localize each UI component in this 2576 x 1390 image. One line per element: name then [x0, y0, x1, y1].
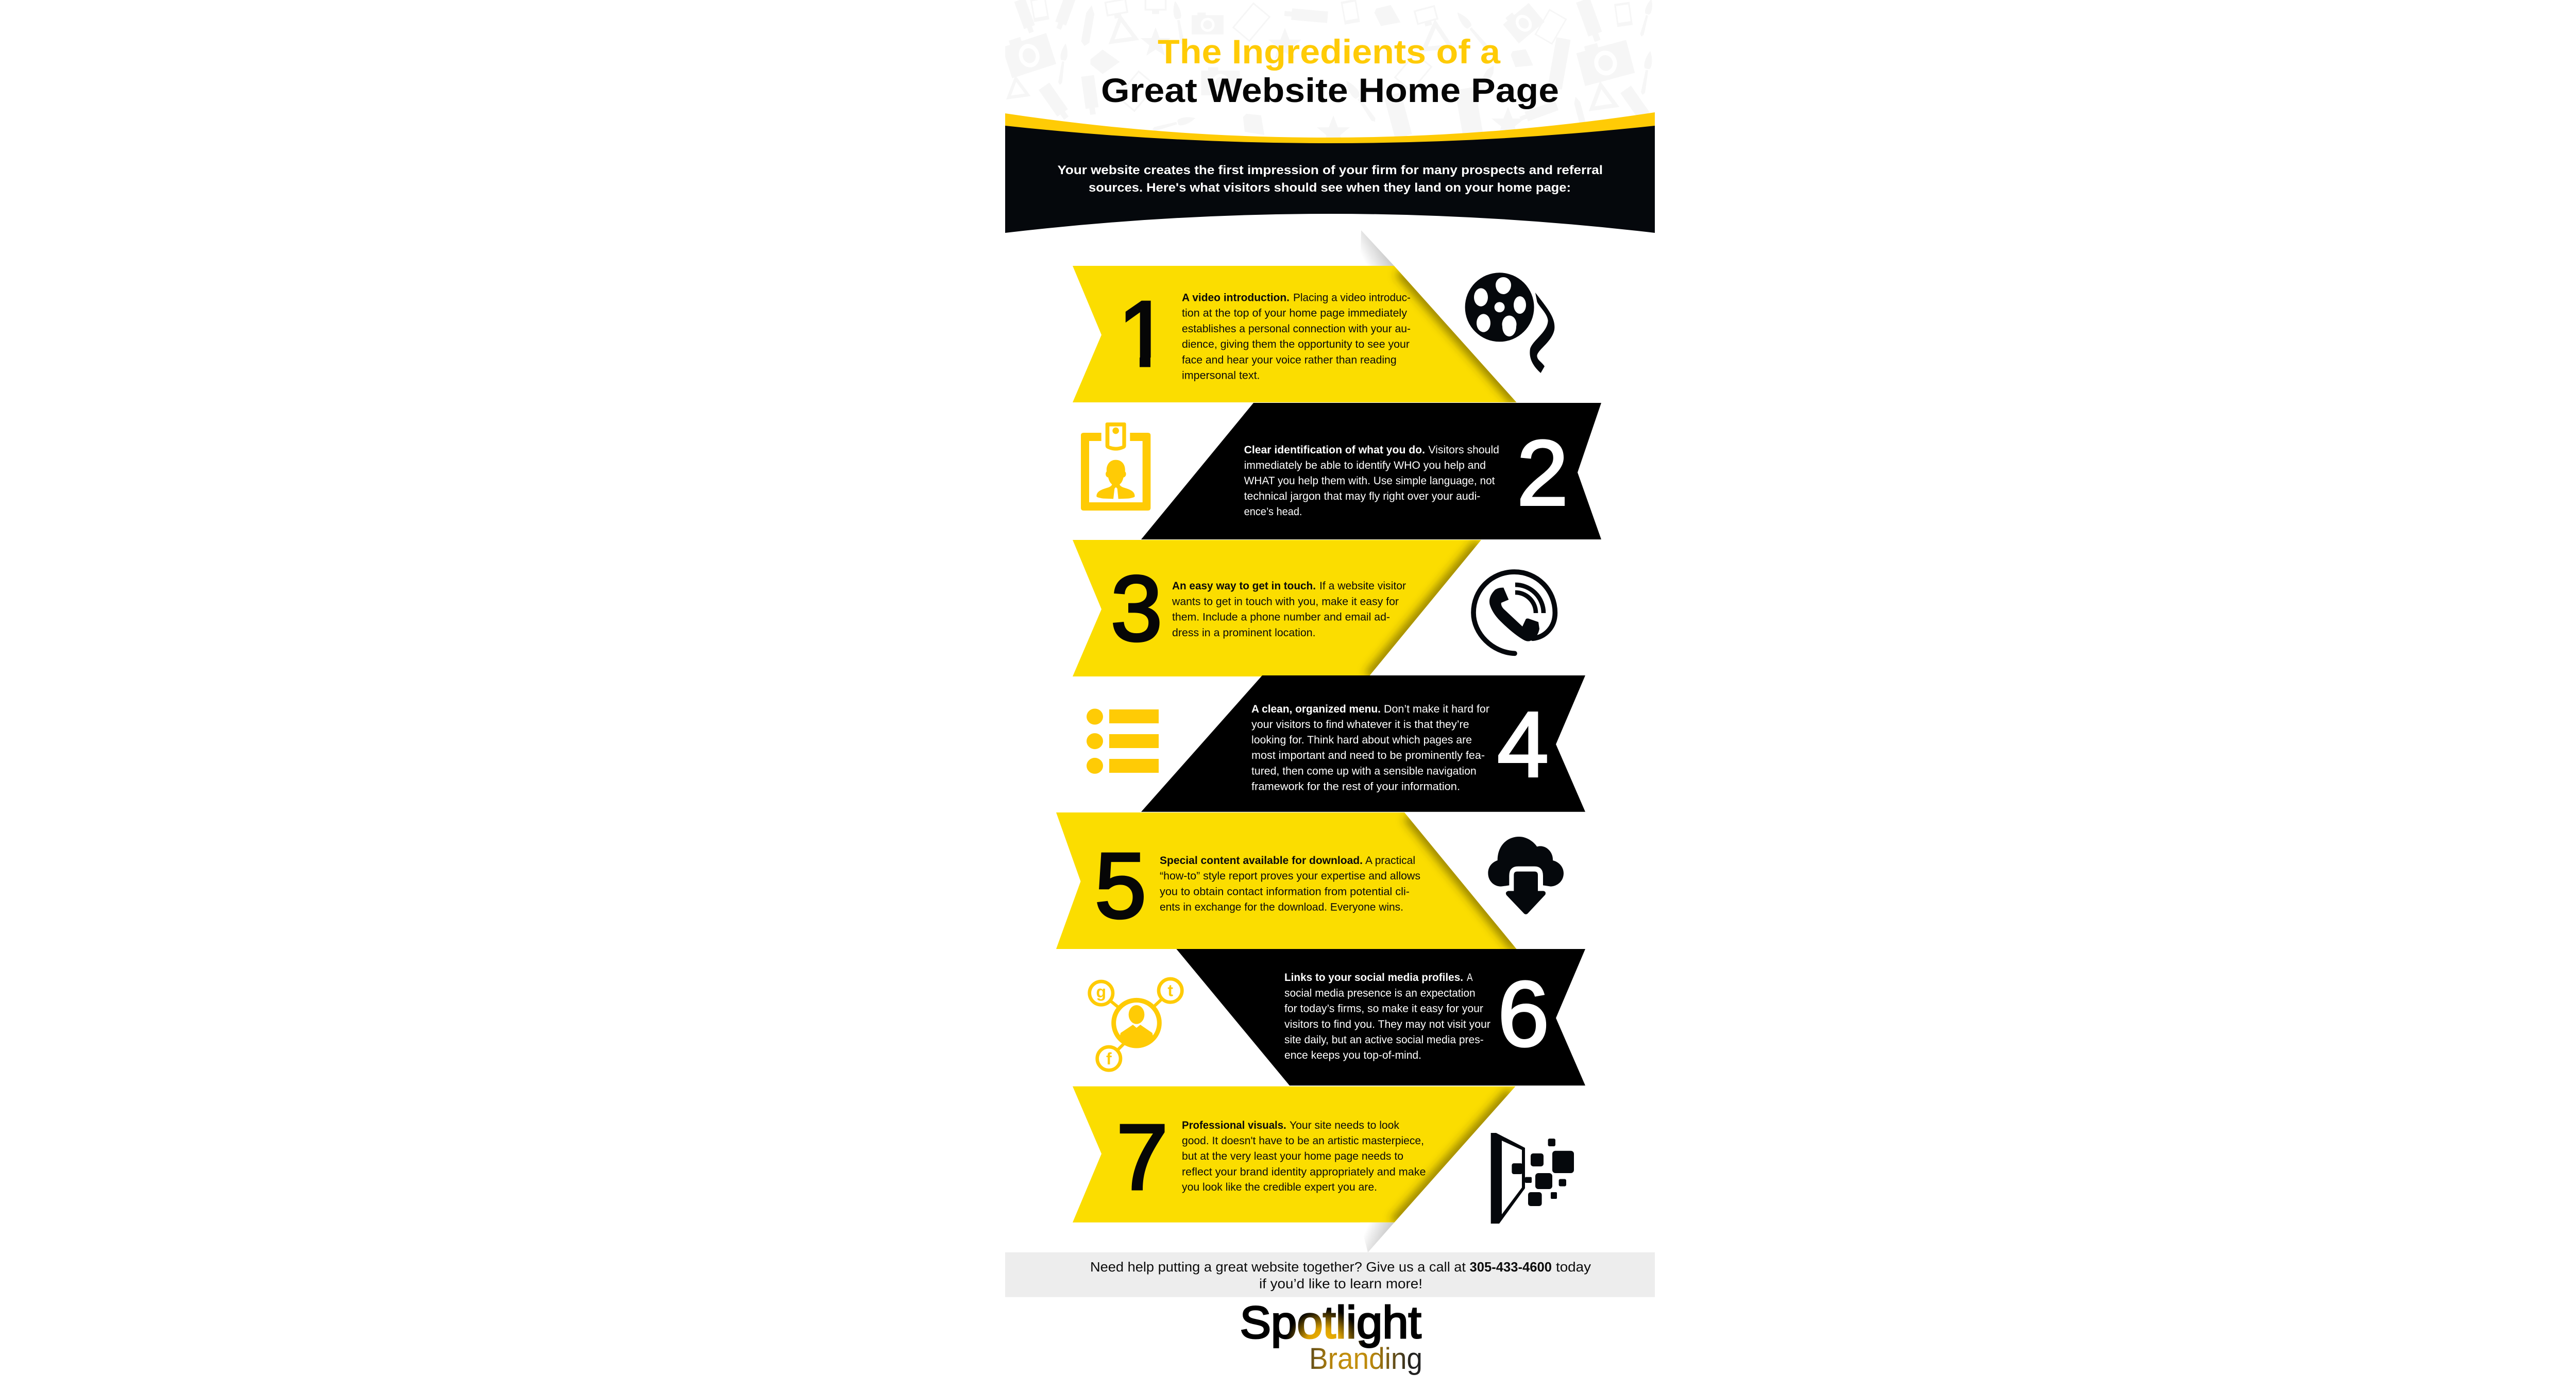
- text: professional visuals: Professional visuals.: [1182, 1120, 1286, 1131]
- number 2: 2: [1517, 421, 1568, 525]
- ribbon 3 edge shading: [1369, 543, 1479, 676]
- intro text: [1057, 163, 1603, 195]
- text: easy way to get in touch: wants to get in touch with you, make it easy for: [1172, 596, 1399, 608]
- text: easy way to get in touch: them. Include a phone number and email ad-: [1172, 612, 1390, 623]
- yellow ribbon 3: [1073, 540, 1481, 676]
- call-to-action text: 305-433-4600: [1469, 1260, 1552, 1275]
- icon: social network: f: [1106, 1049, 1112, 1068]
- text: clean organized menu: tured, then come up with a sensible navigation: [1251, 766, 1477, 777]
- curved yellow band: [1005, 112, 1655, 155]
- text: clear identification: Visitors should: [1428, 444, 1499, 456]
- text: easy way to get in touch: dress in a prominent location.: [1172, 627, 1316, 639]
- ribbon 1 edge shading: [1399, 272, 1517, 402]
- panel: item 5 special content: [1056, 812, 1564, 949]
- text: special content: Special content available for download.: [1160, 855, 1363, 867]
- text: clear identification: ence’s head.: [1244, 506, 1302, 518]
- text: clean organized menu: Don’t make it hard for: [1384, 703, 1489, 715]
- title: [1101, 32, 1559, 109]
- fold shadow above first ribbon: [1360, 230, 1394, 266]
- text: clean organized menu: most important and need to be prominently fea-: [1251, 750, 1485, 761]
- text: clear identification: Clear identification of what you do.: [1244, 444, 1425, 456]
- yellow ribbon 1: [1073, 266, 1517, 402]
- icon: social network: t: [1167, 981, 1173, 999]
- text: professional visuals: Your site needs to look: [1290, 1120, 1400, 1131]
- text: professional visuals: reflect your brand identity appropriately and make: [1182, 1166, 1426, 1178]
- footer call-to-action bar: [1005, 1252, 1655, 1297]
- panel: item 7 professional visuals: [1073, 1087, 1574, 1224]
- number 1: 1: [1118, 282, 1170, 386]
- text: special content: you to obtain contact information from potential cli-: [1160, 886, 1410, 897]
- panel: item 2 clear identification: [1081, 403, 1601, 539]
- title: Great Website Home Page: [1101, 71, 1559, 109]
- title: The Ingredients of a: [1158, 32, 1501, 71]
- black ribbon 4: [1141, 675, 1585, 812]
- black ribbon 2: [1141, 403, 1601, 539]
- call-to-action text: if you’d like to learn more!: [1259, 1277, 1422, 1292]
- text: video introduction: establishes a personal connection with your au-: [1182, 323, 1411, 335]
- Spotlight Branding logo: Spotlight: [1240, 1297, 1421, 1348]
- text: special content: “how-to” style report proves your expertise and allows: [1160, 870, 1420, 882]
- text: social media profiles: visitors to find you. They may not visit your: [1284, 1019, 1490, 1030]
- call-to-action text: Need help putting a great website together? Give us a call at: [1090, 1260, 1466, 1275]
- fold shadow below last ribbon: [1360, 1223, 1394, 1252]
- black ribbon 6: [1176, 949, 1585, 1086]
- text: clear identification: [1244, 444, 1499, 518]
- icon: cloud download: [1488, 837, 1564, 914]
- yellow ribbon 7: [1073, 1087, 1516, 1223]
- text: professional visuals: you look like the credible expert you are.: [1182, 1181, 1377, 1193]
- black intro banner: [1005, 126, 1655, 233]
- number 7: 7: [1116, 1106, 1168, 1209]
- text: social media profiles: site daily, but an active social media pres-: [1284, 1034, 1484, 1046]
- text: clear identification: immediately be able to identify WHO you help and: [1244, 460, 1486, 471]
- panel: item 6 social media: [1090, 949, 1585, 1086]
- background pattern of faint design-tool icons: [1001, 0, 1654, 150]
- text: easy way to get in touch: An easy way to get in touch.: [1172, 580, 1316, 592]
- number 6: 6: [1498, 962, 1549, 1066]
- text: special content: [1160, 855, 1420, 913]
- icon: door with pixels: [1491, 1133, 1574, 1224]
- Spotlight Branding logo: Branding: [1309, 1342, 1422, 1376]
- panel: item 3 easy contact: [1073, 540, 1555, 676]
- text: special content: A practical: [1365, 855, 1415, 867]
- ribbon 5 edge shading: [1408, 816, 1517, 949]
- text: video introduction: dience, giving them the opportunity to see your: [1182, 338, 1410, 350]
- yellow ribbon 5: [1056, 812, 1517, 949]
- text: clear identification: technical jargon that may fly right over your audi-: [1244, 490, 1480, 502]
- call-to-action text: today: [1556, 1260, 1591, 1275]
- icon: social network: [1090, 979, 1182, 1070]
- text: video introduction: tion at the top of your home page immediately: [1182, 308, 1407, 319]
- number 5: 5: [1095, 834, 1146, 938]
- text: clean organized menu: looking for. Think hard about which pages are: [1251, 734, 1472, 746]
- text: social media profiles: social media presence is an expectation: [1284, 987, 1476, 999]
- text: video introduction: A video introduction.: [1182, 292, 1290, 303]
- ribbon 7 edge shading: [1394, 1092, 1511, 1223]
- text: video introduction: impersonal text.: [1182, 370, 1260, 381]
- text: clean organized menu: your visitors to find whatever it is that they’re: [1251, 719, 1469, 731]
- text: clear identification: WHAT you help them with. Use simple language, not: [1244, 475, 1495, 487]
- text: clean organized menu: framework for the rest of your information.: [1251, 781, 1460, 793]
- number 3: 3: [1111, 557, 1162, 660]
- panel: item 1 video introduction: [1073, 266, 1554, 402]
- text: professional visuals: [1182, 1120, 1426, 1193]
- text: special content: ents in exchange for the download. Everyone wins.: [1160, 902, 1403, 913]
- icon: ID badge: [1081, 422, 1150, 511]
- icon: social network: g: [1096, 982, 1106, 1001]
- text: professional visuals: but at the very least your home page needs to: [1182, 1150, 1403, 1162]
- text: social media profiles: for today’s firms, so make it easy for your: [1284, 1003, 1483, 1015]
- text: easy way to get in touch: [1172, 580, 1406, 639]
- panel: item 4 clean menu: [1087, 675, 1585, 812]
- call-to-action text: [1090, 1260, 1591, 1292]
- text: easy way to get in touch: If a website visitor: [1319, 580, 1406, 592]
- text: clean organized menu: A clean, organized menu.: [1251, 703, 1381, 715]
- text: video introduction: face and hear your voice rather than reading: [1182, 354, 1397, 366]
- icon: telephone: [1473, 572, 1555, 653]
- text: social media profiles: ence keeps you top-of-mind.: [1284, 1049, 1421, 1061]
- text: social media profiles: A: [1467, 972, 1473, 984]
- Spotlight Branding logo: [1240, 1297, 1422, 1376]
- text: clean organized menu: [1251, 703, 1489, 793]
- text: social media profiles: [1284, 972, 1490, 1061]
- text: video introduction: [1182, 292, 1411, 381]
- icon: film reel: [1465, 273, 1554, 373]
- icon: menu list: [1087, 709, 1159, 774]
- intro text: Your website creates the first impression of your firm for many prospects and referral: [1057, 163, 1603, 177]
- text: social media profiles: Links to your social media profiles.: [1284, 972, 1463, 984]
- intro text: sources. Here's what visitors should see when they land on your home page:: [1089, 181, 1571, 195]
- text: video introduction: Placing a video introduc-: [1293, 292, 1411, 303]
- number 4: 4: [1497, 693, 1549, 796]
- text: professional visuals: good. It doesn't have to be an artistic masterpiece,: [1182, 1135, 1424, 1147]
